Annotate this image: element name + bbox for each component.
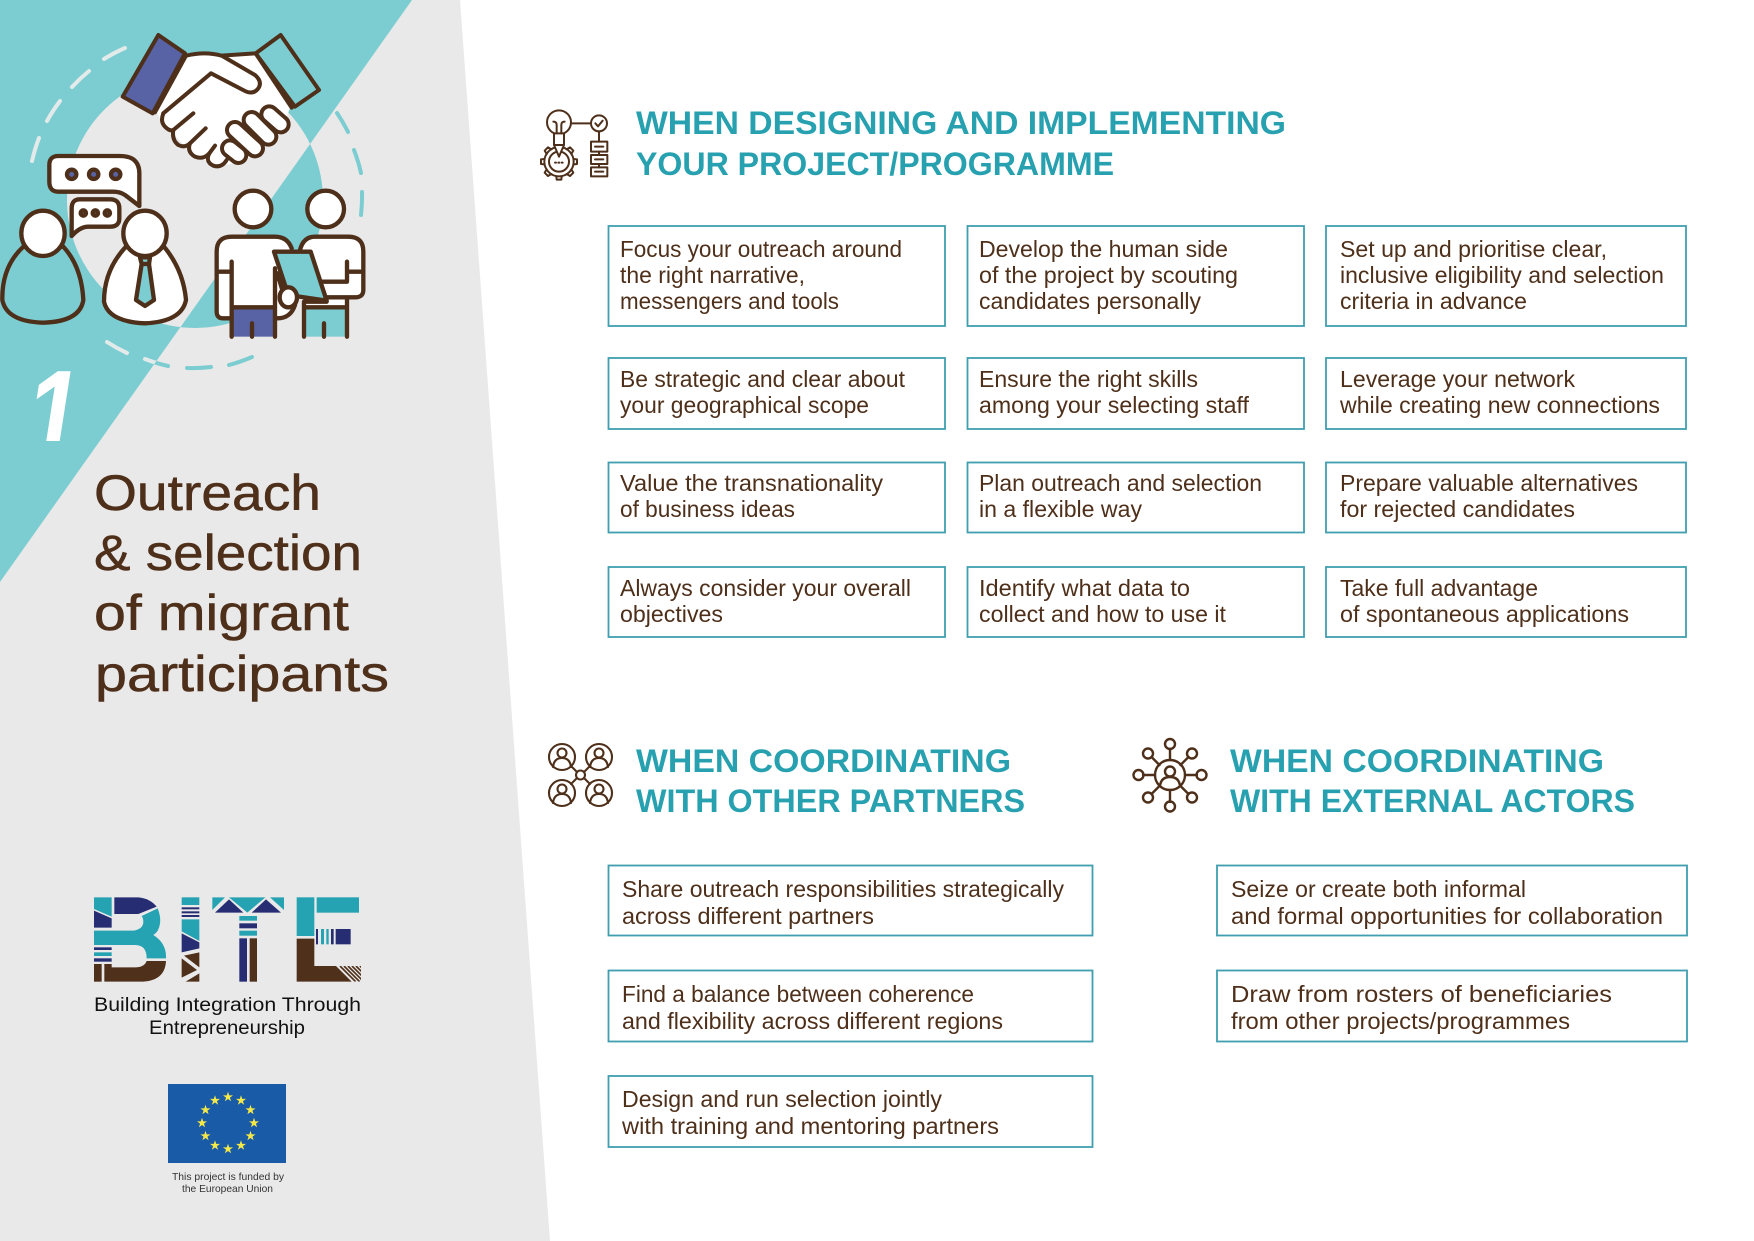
card: candidates personally: [979, 288, 1201, 314]
heading: WHEN DESIGNING AND IMPLEMENTING: [636, 105, 1286, 141]
title: of migrant: [94, 585, 349, 641]
title: [94, 465, 389, 702]
card: [1326, 226, 1686, 326]
section number: 1: [26, 346, 80, 482]
card: [1326, 358, 1686, 429]
card: Prepare valuable alternatives: [1340, 470, 1638, 496]
card: Set up and prioritise clear,: [1340, 236, 1607, 262]
card: the right narrative,: [620, 262, 805, 288]
card: [1326, 462, 1686, 532]
card: among your selecting staff: [979, 392, 1250, 418]
section: other partners: [549, 743, 1092, 1147]
card: Leverage your network: [1340, 366, 1575, 392]
card: [1326, 567, 1686, 637]
title: & selection: [94, 525, 362, 581]
card: [608, 567, 945, 637]
heading: [1230, 743, 1635, 819]
card: of spontaneous applications: [1340, 601, 1629, 627]
icon: two people with clipboard: [217, 191, 363, 337]
card: Value the transnationality: [620, 470, 884, 496]
card: with training and mentoring partners: [621, 1113, 999, 1139]
heading: WHEN COORDINATING: [1230, 743, 1604, 779]
card: in a flexible way: [979, 496, 1143, 522]
card: criteria in advance: [1340, 288, 1527, 314]
card: [608, 358, 945, 429]
card: [968, 567, 1304, 637]
card: [608, 462, 945, 532]
card: and formal opportunities for collaboration: [1231, 903, 1663, 929]
card: Design and run selection jointly: [622, 1086, 942, 1112]
card: Plan outreach and selection: [979, 470, 1262, 496]
card: Focus your outreach around: [620, 236, 902, 262]
card: Find a balance between coherence: [622, 981, 974, 1007]
card: Seize or create both informal: [1231, 876, 1526, 902]
logo tagline: Entrepreneurship: [149, 1018, 305, 1039]
card: inclusive eligibility and selection: [1340, 262, 1664, 288]
card: Draw from rosters of beneficiaries: [1231, 981, 1612, 1007]
heading: WHEN COORDINATING: [636, 743, 1011, 779]
heading: WITH OTHER PARTNERS: [636, 783, 1025, 819]
BITE logo: [94, 897, 376, 982]
heading: WITH EXTERNAL ACTORS: [1230, 783, 1635, 819]
card: while creating new connections: [1339, 392, 1660, 418]
card: collect and how to use it: [979, 601, 1227, 627]
icon: lightbulb, gear and flowchart: [541, 110, 607, 180]
icon: two people talking: [2, 156, 186, 323]
card: [608, 1076, 1092, 1147]
funding note: This project is funded by: [172, 1171, 285, 1183]
icon: handshake: [123, 35, 319, 167]
card: of business ideas: [620, 496, 795, 522]
card: [1217, 866, 1687, 936]
funding note: [172, 1171, 285, 1195]
card: of the project by scouting: [979, 262, 1238, 288]
icon: connected partners: [549, 744, 612, 806]
card: Always consider your overall: [620, 575, 911, 601]
card: Develop the human side: [979, 236, 1228, 262]
funding note: the European Union: [182, 1183, 273, 1195]
card: your geographical scope: [620, 392, 869, 418]
heading: [636, 105, 1286, 182]
logo tagline: Building Integration Through: [94, 995, 361, 1016]
card: [608, 226, 945, 326]
card: across different partners: [622, 903, 874, 929]
card: Share outreach responsibilities strategically: [622, 876, 1064, 902]
icon: network hub: [1134, 739, 1206, 812]
card: from other projects/programmes: [1231, 1008, 1570, 1034]
title: participants: [95, 646, 389, 702]
card: [1217, 970, 1687, 1042]
icon: EU flag: [168, 1084, 286, 1163]
card: [968, 358, 1304, 429]
section: designing and implementing: [541, 105, 1686, 637]
card: for rejected candidates: [1340, 496, 1575, 522]
card: [968, 462, 1304, 532]
card: objectives: [620, 601, 723, 627]
dashed ring: [32, 48, 362, 368]
card: messengers and tools: [620, 288, 839, 314]
card: [608, 866, 1092, 936]
panel: left sidebar: [0, 0, 550, 1241]
card: and flexibility across different regions: [622, 1008, 1003, 1034]
card: [968, 226, 1304, 326]
title: Outreach: [94, 465, 321, 521]
card: Identify what data to: [979, 575, 1190, 601]
card: Ensure the right skills: [979, 366, 1198, 392]
section: external actors: [1134, 739, 1687, 1042]
heading: [636, 743, 1025, 819]
heading: YOUR PROJECT/PROGRAMME: [636, 146, 1114, 182]
card: Be strategic and clear about: [620, 366, 906, 392]
card: [608, 970, 1092, 1042]
logo tagline: [94, 995, 361, 1039]
card: Take full advantage: [1340, 575, 1538, 601]
